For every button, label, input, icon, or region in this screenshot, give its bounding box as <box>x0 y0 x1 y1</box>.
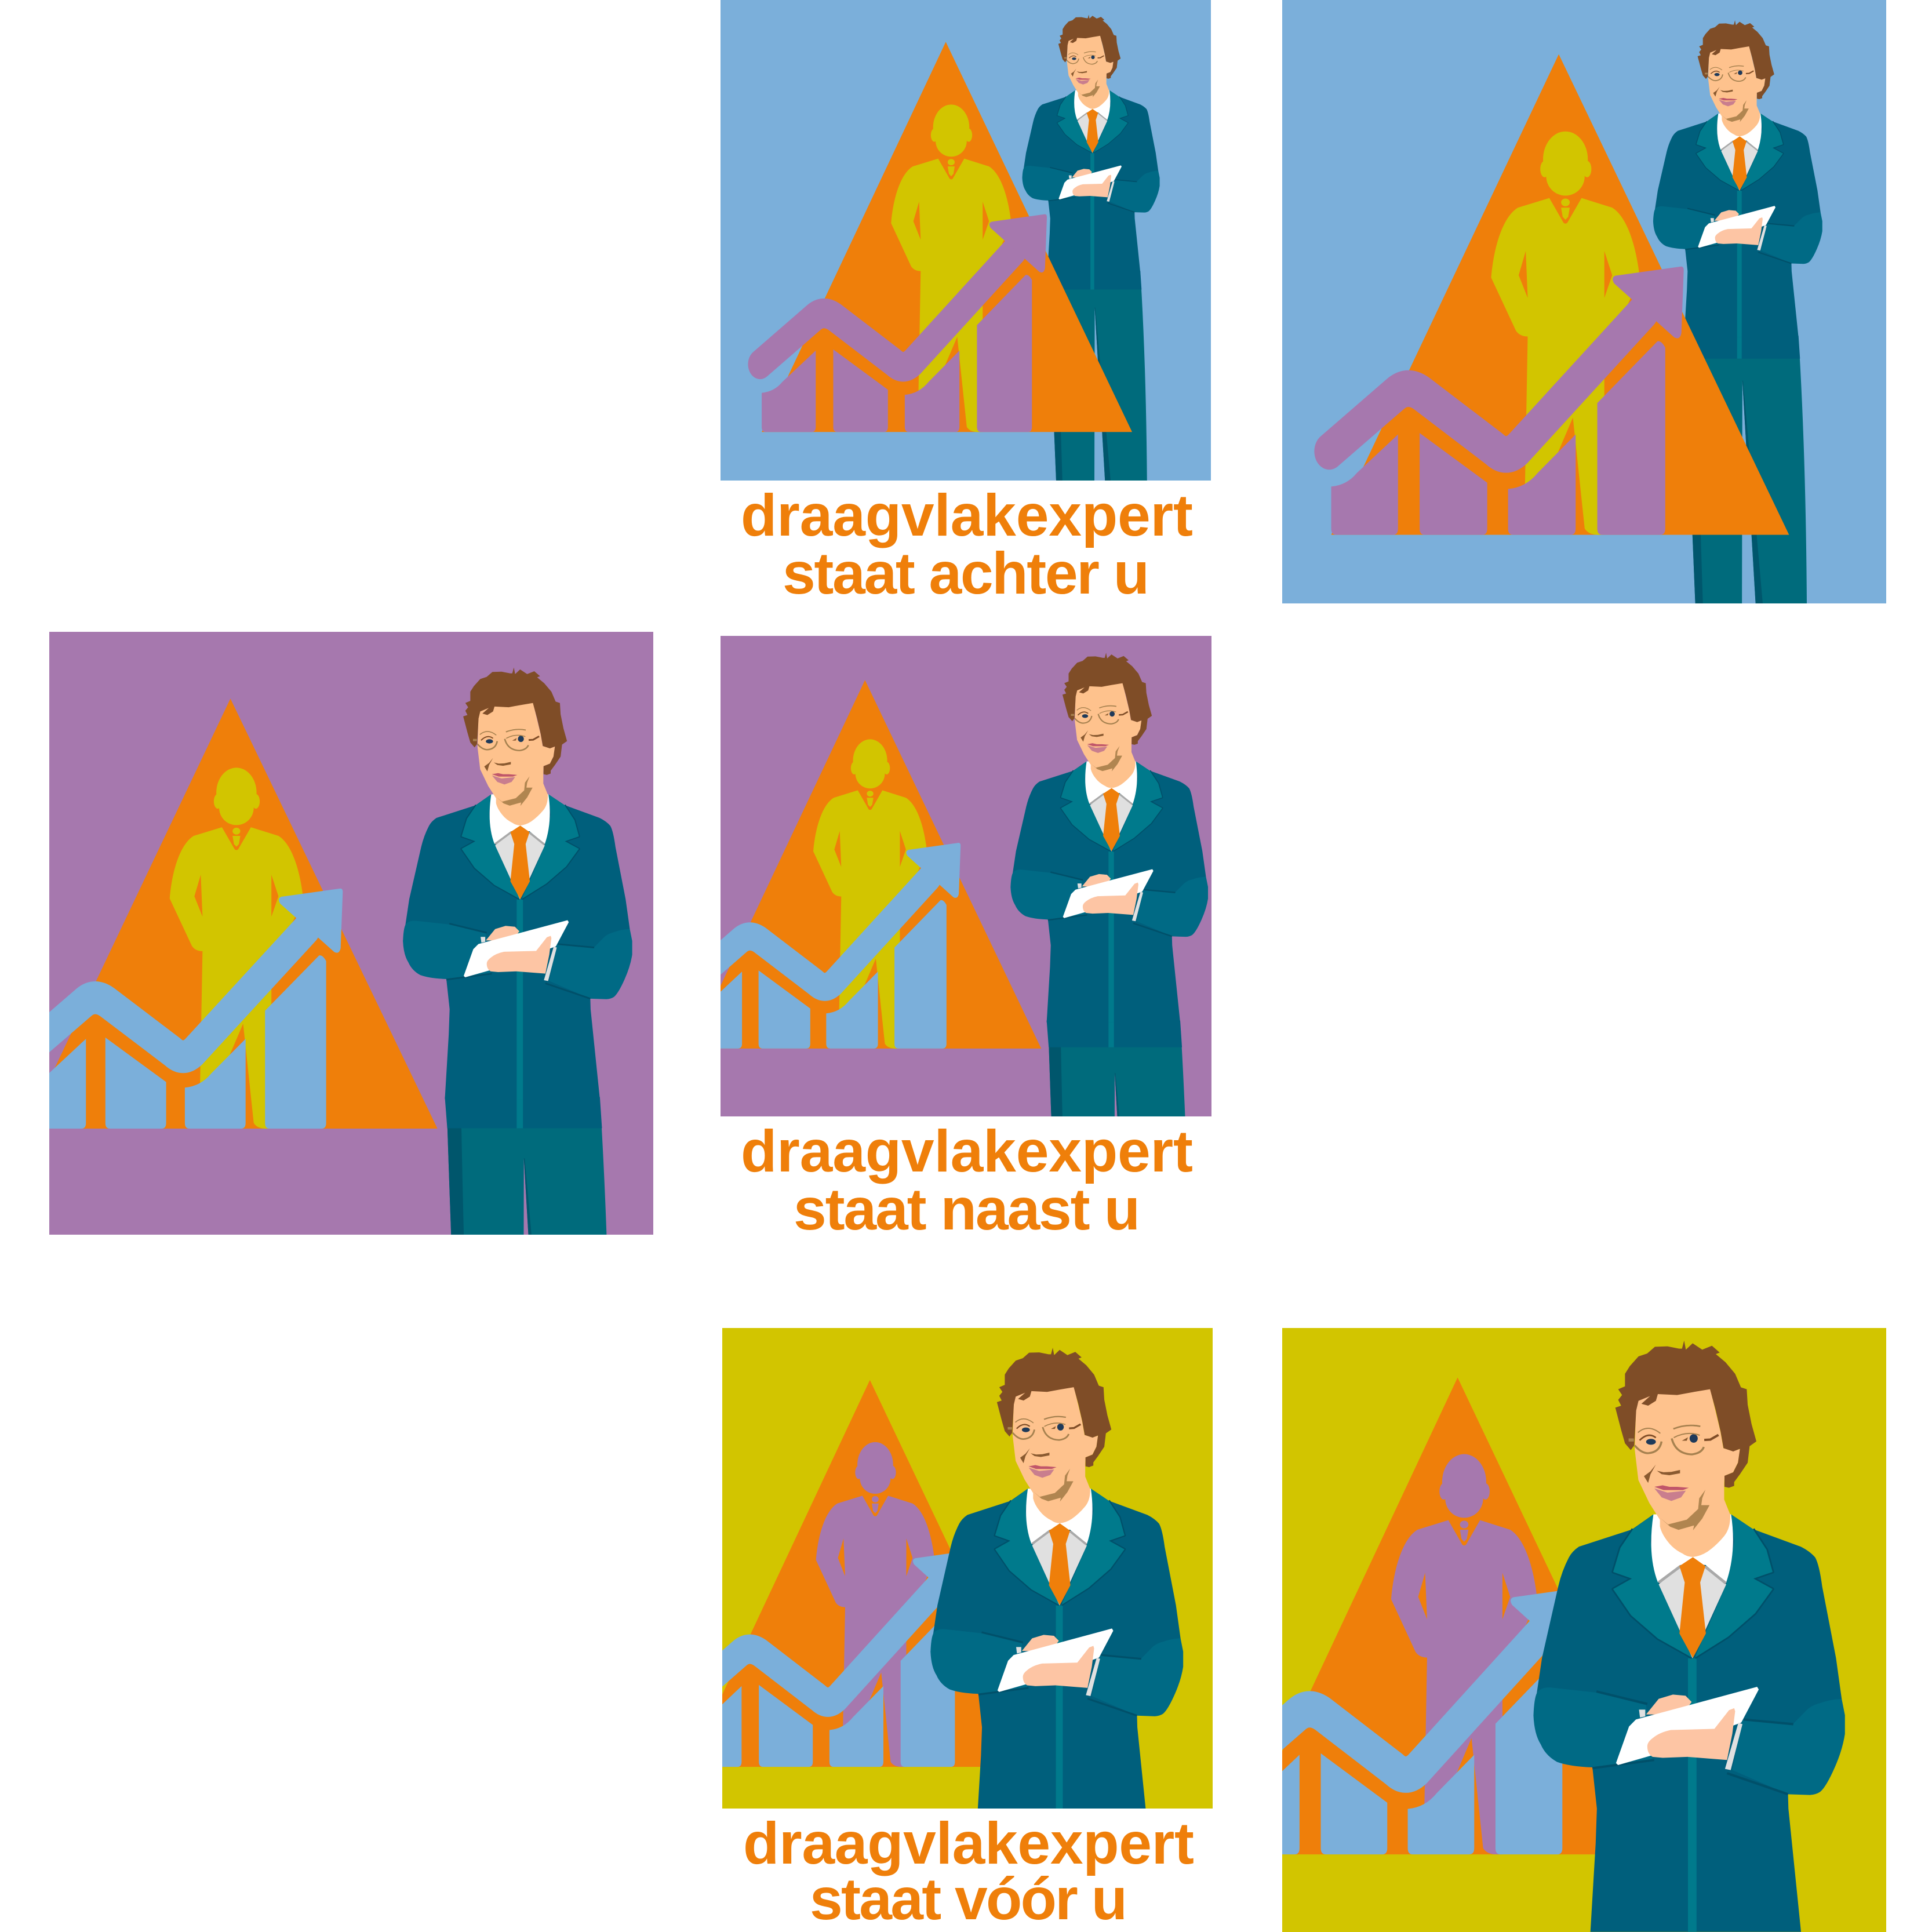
expert figure <box>403 667 632 1478</box>
bar chart <box>1234 1662 1562 1854</box>
background <box>49 632 653 1235</box>
scene: triangle, silhouette and chart <box>24 698 438 1129</box>
silhouette <box>1391 1454 1537 1854</box>
panel: purple small, expert beside <box>689 636 1211 1347</box>
scene: triangle, silhouette and chart <box>689 680 1041 1049</box>
background <box>721 636 1211 1116</box>
silhouette <box>891 104 1012 432</box>
rising arrow <box>689 843 960 987</box>
caption: staat naast u: staat naast u <box>794 1176 1140 1242</box>
expert figure <box>1653 20 1822 616</box>
triangle <box>691 680 1041 1049</box>
caption: staat vóór u <box>743 1810 1194 1932</box>
triangle <box>26 698 438 1129</box>
rising arrow <box>1329 267 1684 454</box>
caption: staat vóór u: staat vóór u <box>810 1866 1127 1932</box>
caption: staat achter u <box>741 482 1193 606</box>
panel: yellow small, expert in front <box>687 1328 1213 1827</box>
bar chart <box>762 275 1032 432</box>
caption: staat achter u: draagvlakexpert <box>741 482 1193 548</box>
background <box>721 0 1211 481</box>
rising arrow <box>24 889 343 1057</box>
caption: staat naast u <box>741 1118 1193 1242</box>
panel: blue large, expert behind <box>1282 0 1886 616</box>
panel: blue small, expert behind <box>721 0 1211 498</box>
silhouette <box>170 767 303 1129</box>
background <box>722 1328 1213 1809</box>
expert figure <box>1010 653 1208 1347</box>
bar chart <box>26 955 326 1129</box>
panel: purple large, expert beside <box>49 632 653 1235</box>
rising arrow <box>1232 1588 1581 1775</box>
caption: staat vóór u: draagvlakexpert <box>743 1810 1194 1876</box>
expert figure <box>1533 1341 1845 1932</box>
scene: triangle, silhouette and chart <box>1232 1377 1684 1854</box>
bar chart <box>1331 341 1665 535</box>
panel: yellow large, expert in front <box>1232 1328 1886 1932</box>
triangle <box>1234 1377 1684 1854</box>
bar chart <box>691 900 947 1049</box>
bar chart <box>688 1611 955 1767</box>
triangle <box>688 1380 1054 1767</box>
background <box>1282 0 1886 603</box>
caption: staat achter u: staat achter u <box>783 540 1149 606</box>
scene: triangle, silhouette and chart <box>1329 54 1789 535</box>
expert figure <box>930 1348 1183 1827</box>
triangle <box>1331 54 1789 535</box>
caption: staat naast u: draagvlakexpert <box>741 1118 1193 1184</box>
silhouette <box>1491 132 1640 535</box>
background <box>1282 1328 1886 1932</box>
triangle <box>762 42 1132 432</box>
rising arrow <box>760 214 1047 367</box>
expert figure <box>1023 14 1160 498</box>
scene: triangle, silhouette and chart <box>687 1380 1054 1767</box>
scene: triangle, silhouette and chart <box>760 42 1132 432</box>
silhouette <box>816 1442 934 1767</box>
rising arrow <box>687 1551 970 1702</box>
silhouette <box>813 739 927 1049</box>
